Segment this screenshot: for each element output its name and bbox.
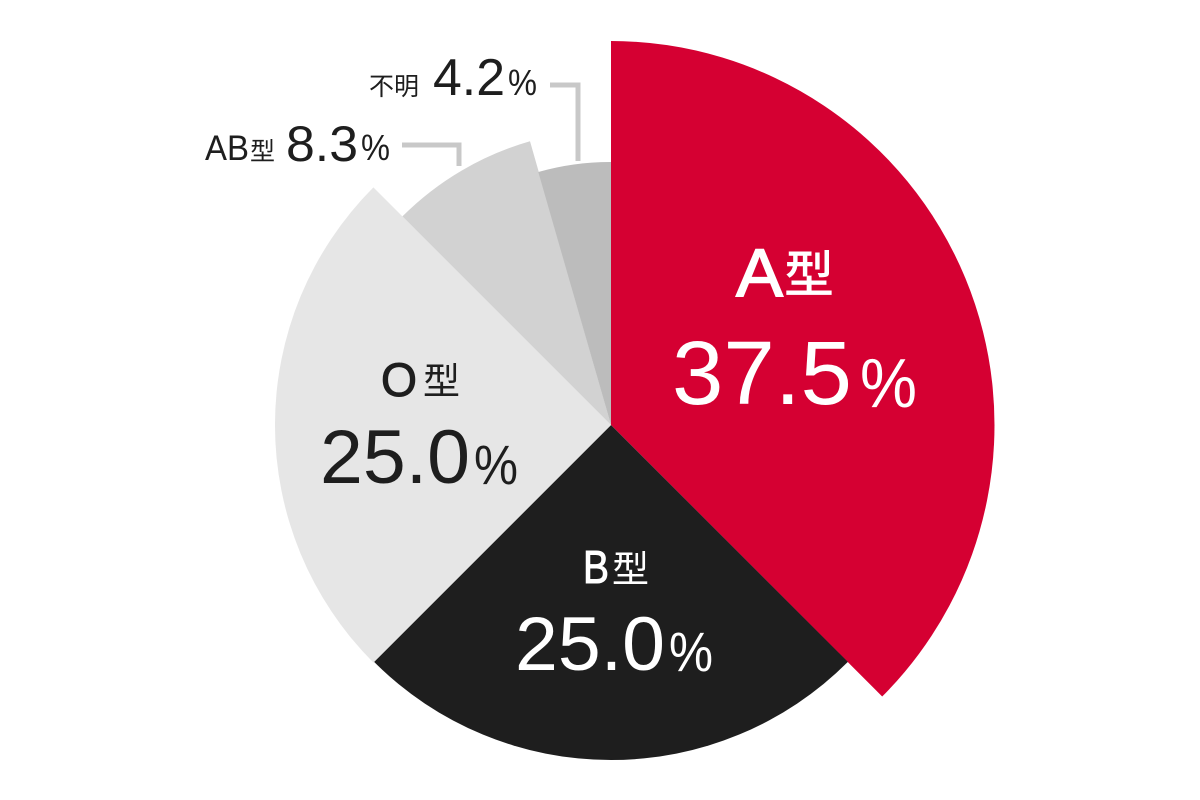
leader line: unknown — [550, 85, 578, 161]
label: B type: B — [583, 541, 609, 593]
leader line: AB type — [402, 145, 459, 166]
label: AB type 8.3%: AB — [205, 129, 249, 168]
label: B type — [515, 541, 713, 687]
label: AB type 8.3%: 8.3 — [286, 116, 358, 172]
slice: B type 25.0% — [374, 425, 848, 760]
label: AB type 8.3%: 型 — [250, 138, 275, 166]
slice: A type 37.5% — [611, 41, 994, 696]
label: O type: 25.0 — [320, 415, 470, 500]
label: A type: 37.5 — [672, 324, 852, 424]
label: A type: A — [736, 235, 784, 311]
slice: AB type 8.3% — [402, 141, 611, 425]
label: O type: 型 — [423, 361, 460, 402]
label: O type — [320, 353, 518, 500]
label: unknown 4.2%: % — [508, 62, 537, 103]
label: B type: % — [669, 620, 713, 683]
label: unknown 4.2%: 4.2 — [433, 49, 505, 107]
label: O type: O — [381, 353, 417, 406]
label: AB type 8.3%: % — [361, 127, 390, 168]
label: A type: 型 — [784, 247, 834, 303]
slice: unknown 4.2% — [538, 162, 611, 425]
label: A type: % — [860, 344, 917, 422]
label: O type: % — [474, 433, 518, 496]
label: B type: 型 — [612, 549, 649, 590]
label: AB type 8.3% — [205, 116, 390, 172]
label: B type: 25.0 — [515, 602, 665, 687]
label: unknown 4.2%: 不明 — [369, 73, 419, 101]
label: A type — [672, 235, 917, 424]
slice: O type 25.0% — [275, 187, 611, 663]
label: unknown 4.2% — [369, 49, 537, 107]
